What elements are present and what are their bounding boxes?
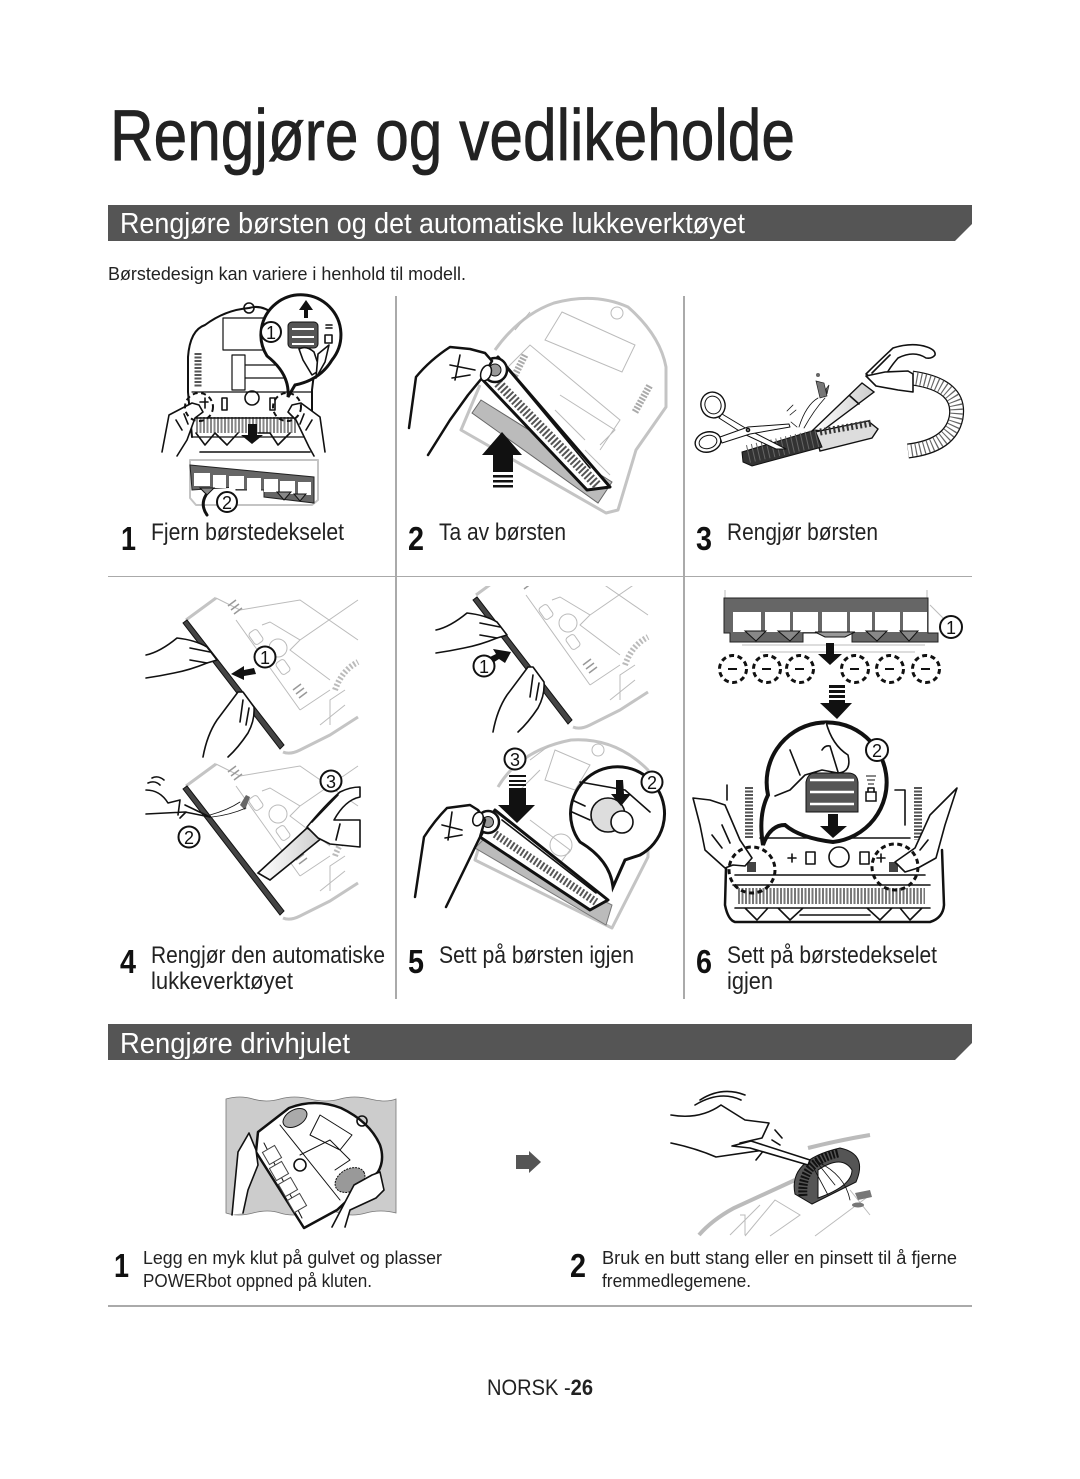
step 4 label: Rengjør den automatiske	[151, 942, 385, 969]
magnified axle	[571, 767, 665, 887]
bottom step 2 text: Bruk en butt stang eller en pinsett til å fjerne	[602, 1248, 957, 1268]
step 2 label	[408, 519, 566, 557]
number 3	[320, 770, 342, 792]
step 6 label: 6	[696, 943, 712, 980]
arrow down	[241, 424, 263, 444]
hand	[409, 347, 493, 455]
step 1 label	[121, 519, 344, 557]
small arrow	[818, 643, 842, 665]
debris	[852, 1190, 872, 1208]
illustration: cleaning the wheel	[671, 1091, 872, 1236]
step 4 label: lukkeverktøyet	[151, 968, 293, 995]
magnified latch	[261, 295, 341, 397]
magnifier	[761, 722, 887, 845]
bottom step 1 text: POWERbot oppned på kluten.	[143, 1271, 372, 1291]
illustration: step 1 remove brush cover	[162, 295, 341, 515]
step 3 label: Rengjør børsten	[727, 519, 878, 546]
robot	[256, 1103, 382, 1228]
removed cover	[190, 460, 318, 505]
number 1	[261, 322, 281, 343]
hands	[162, 403, 325, 456]
hand and stick	[671, 1091, 810, 1165]
step 2 label: 2	[408, 520, 424, 557]
step 1 label: 1	[121, 520, 136, 557]
illustration: step 3 clean brush	[693, 345, 957, 466]
step 6 label: Sett på børstedekselet	[727, 942, 937, 969]
number 2: 2	[184, 828, 194, 848]
section heading: drive wheel	[108, 1024, 972, 1060]
gray tray	[472, 400, 612, 503]
section heading: drive wheel: Rengjøre drivhjulet	[120, 1028, 350, 1060]
lower view robot	[475, 740, 648, 928]
bottom step 1 text	[114, 1247, 442, 1291]
debris	[787, 373, 829, 428]
number 1	[940, 616, 962, 638]
number 2	[642, 772, 662, 793]
wheel	[794, 1148, 860, 1204]
arrow up	[482, 432, 522, 488]
section heading: brush: Rengjøre børsten og det automatiske lukkeverktøyet	[120, 208, 745, 240]
step 5 label: Sett på børsten igjen	[439, 942, 634, 969]
step 4 label	[120, 942, 385, 995]
step 6 label	[696, 942, 937, 995]
step 3 label	[696, 519, 878, 557]
number 1: 1	[260, 648, 270, 668]
page number: NORSK -26	[487, 1375, 593, 1400]
illustration: robot on cloth	[226, 1097, 396, 1228]
cover	[724, 598, 938, 642]
bottom step 2 text	[570, 1247, 957, 1291]
number 1: 1	[479, 657, 489, 677]
bottom step 1 text: Legg en myk klut på gulvet og plasser	[143, 1248, 442, 1268]
large arrow	[820, 685, 852, 719]
step 5 label: 5	[408, 943, 424, 980]
hand	[415, 805, 485, 907]
robot body	[725, 785, 944, 922]
bottom step 2 text: 2	[570, 1247, 586, 1284]
brush	[477, 810, 608, 910]
note text: Børstedesign kan variere i henhold til modell.	[108, 264, 466, 284]
arrow between steps	[516, 1151, 541, 1173]
bottom step 1 text: 1	[114, 1247, 129, 1284]
number 1: 1	[266, 323, 276, 343]
number 2	[178, 826, 200, 848]
robot outline	[461, 298, 666, 513]
hands	[232, 1133, 384, 1227]
arrow down	[498, 775, 535, 823]
robot underside	[188, 303, 318, 452]
grid dividers	[108, 296, 972, 999]
vacuum handle and wand	[813, 345, 935, 431]
number 3: 3	[326, 772, 336, 792]
dashed clip circles	[720, 656, 940, 682]
illustration: step 4 clean lock tool	[146, 598, 360, 919]
number 1: 1	[946, 618, 956, 638]
number 1	[254, 646, 276, 668]
number 2: 2	[647, 773, 657, 793]
illustration: step 2 remove brush	[409, 298, 666, 513]
dashed highlight circles	[185, 393, 301, 421]
step 4 label: 4	[120, 943, 137, 980]
hose	[908, 378, 957, 451]
number 1	[474, 656, 494, 677]
step 6 label: igjen	[727, 968, 773, 995]
illustration: step 6 refit cover	[693, 590, 962, 922]
background body	[725, 590, 945, 652]
number 2	[866, 739, 888, 761]
number 3: 3	[510, 750, 520, 770]
step 5 label	[408, 942, 634, 980]
step 1 label: Fjern børstedekselet	[151, 519, 344, 546]
step 2 label: Ta av børsten	[439, 519, 566, 546]
scissors	[693, 389, 790, 455]
bottom step 2 text: fremmedlegemene.	[602, 1271, 751, 1291]
cloth	[226, 1097, 396, 1215]
hands	[693, 788, 957, 872]
robot outline	[699, 1135, 870, 1236]
lower view with vacuum	[146, 764, 360, 919]
title: Rengjøre og vedlikeholde	[110, 96, 795, 176]
illustration: step 5 refit brush	[415, 573, 665, 928]
number 2: 2	[872, 741, 882, 761]
number 3	[504, 748, 526, 770]
number 2 with curved arrow	[203, 492, 237, 515]
upper view	[436, 573, 648, 732]
number 2 with curved arrow: 2	[222, 493, 232, 513]
brush	[742, 421, 878, 466]
step 3 label: 3	[696, 520, 712, 557]
dashed highlight circles	[729, 844, 918, 893]
section heading: brush	[108, 205, 972, 241]
brush	[480, 357, 610, 490]
upper view	[146, 598, 358, 757]
